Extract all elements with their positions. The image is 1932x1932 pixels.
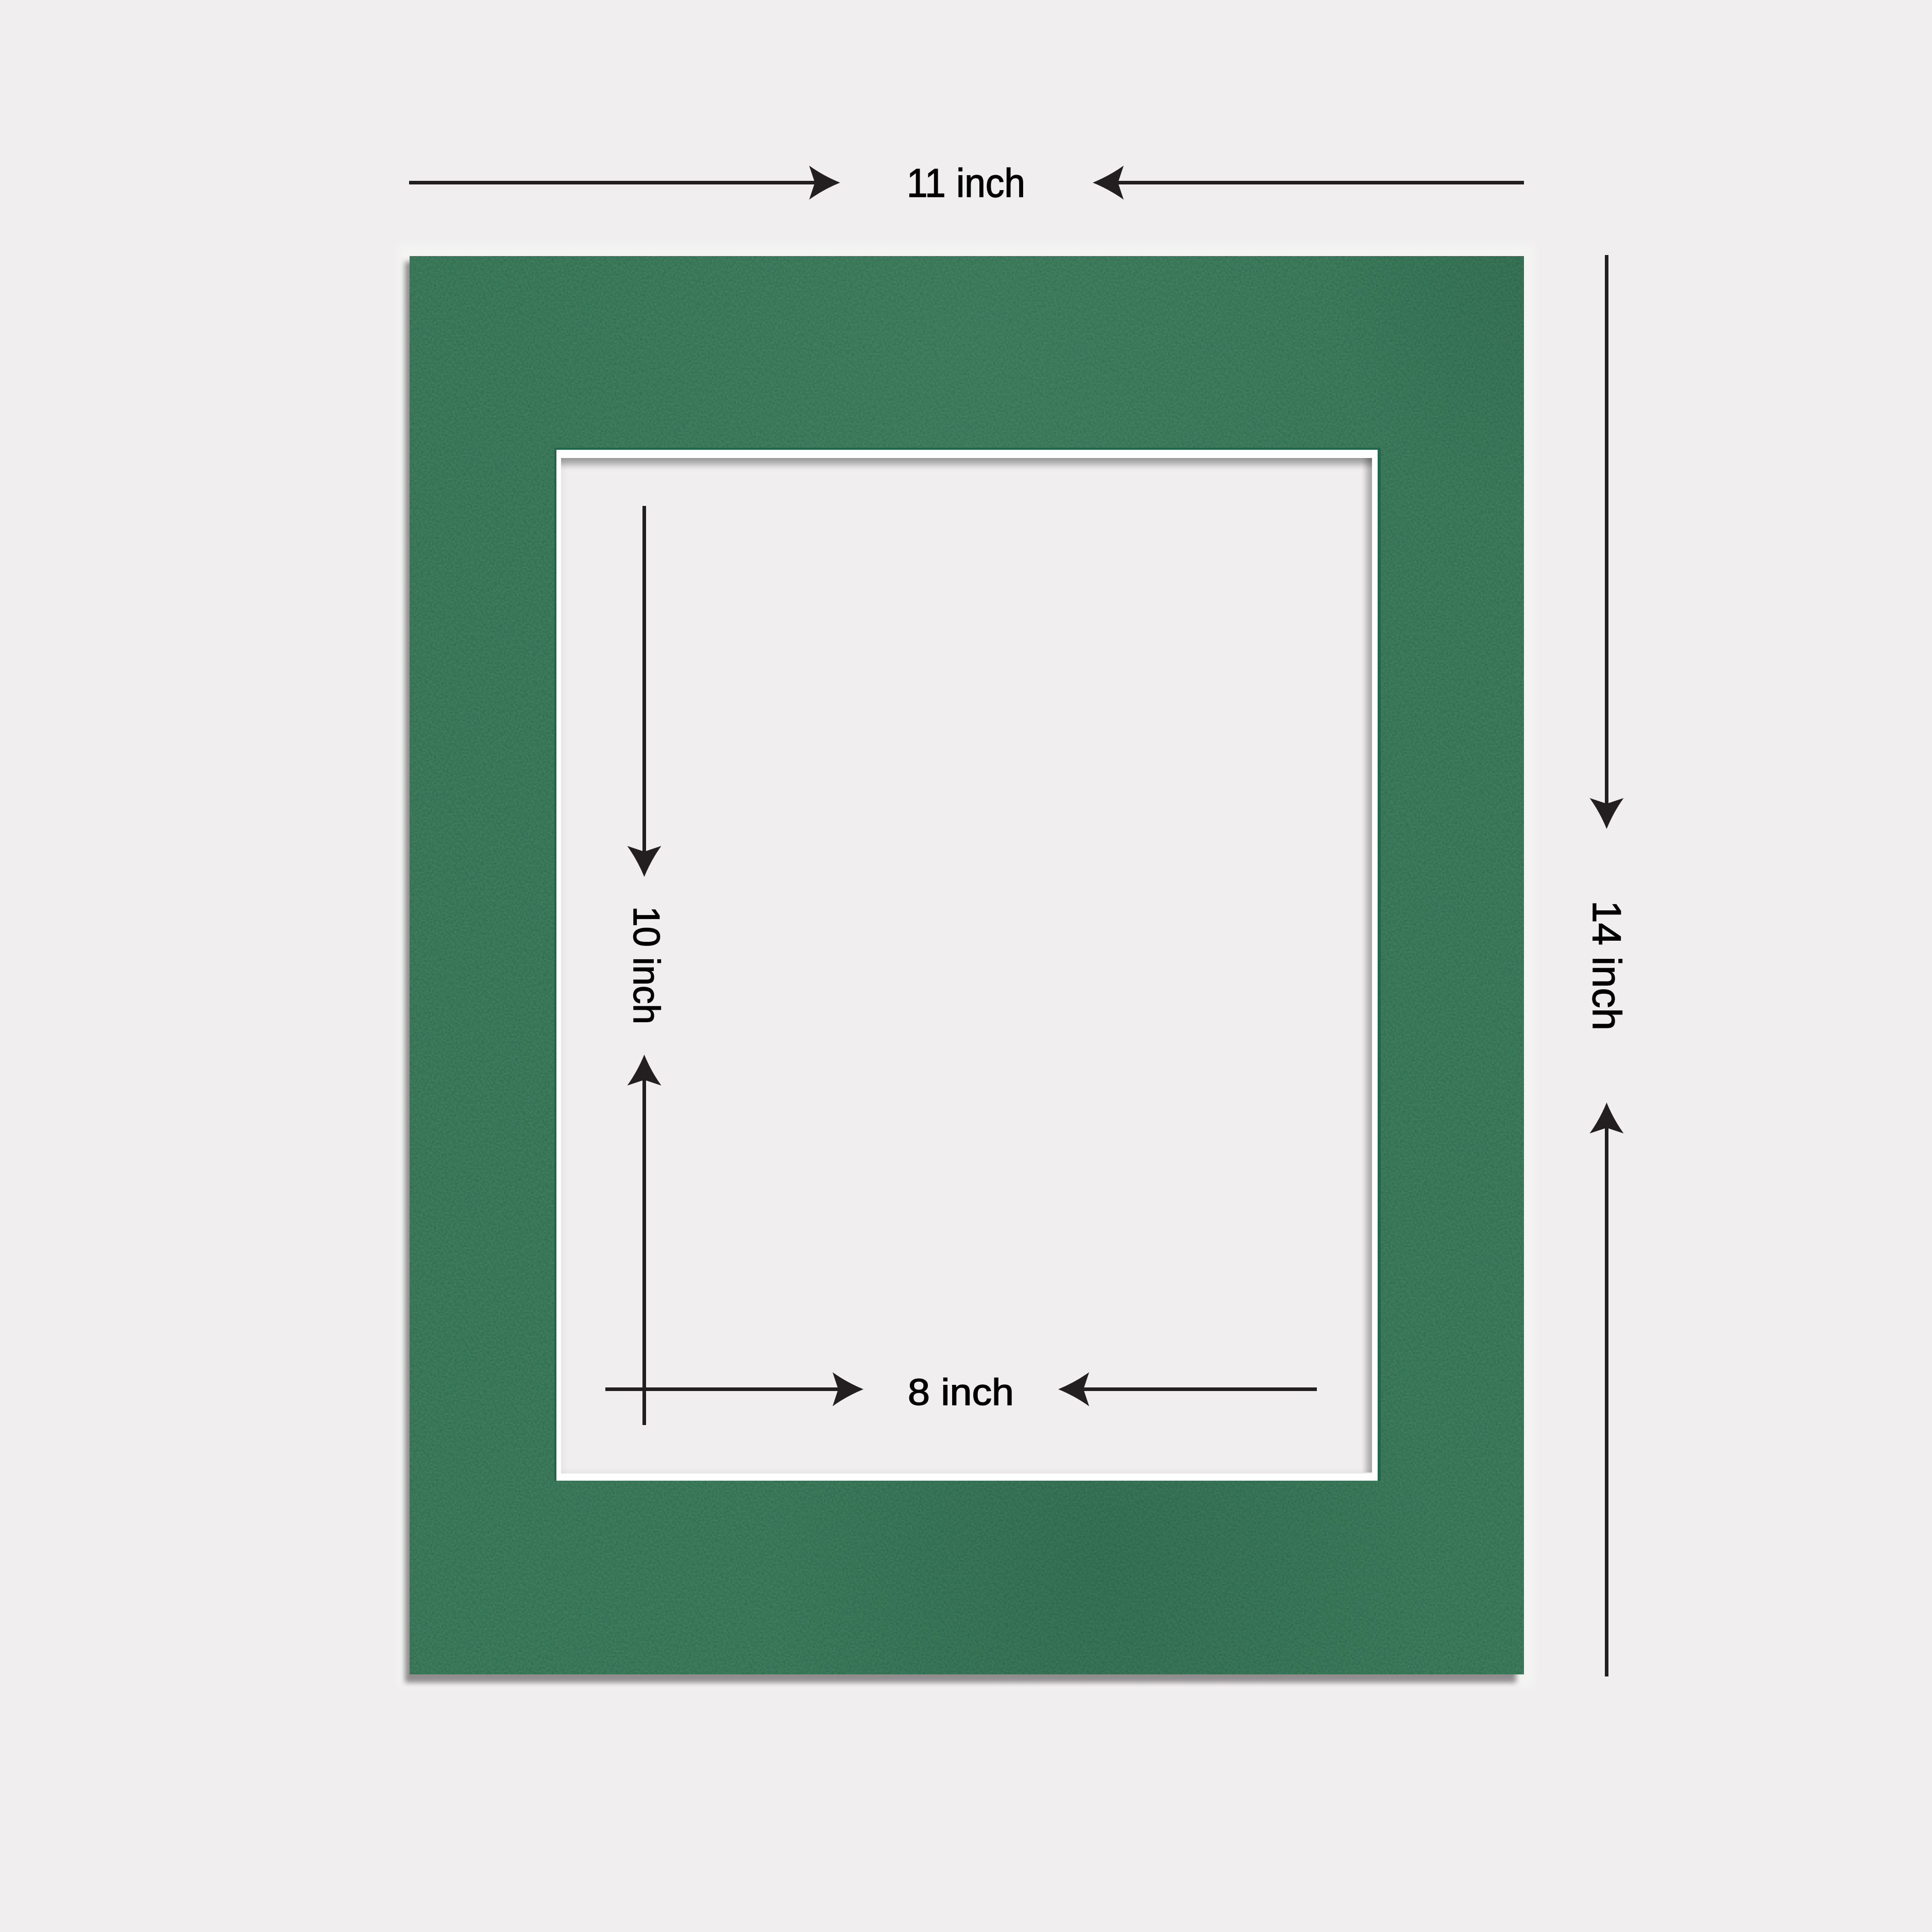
label: 10 inch: 10 inch <box>625 906 667 1024</box>
arrow: 14 inch height, bottom side <box>1590 1103 1624 1676</box>
window cut-out with white bevel <box>554 448 1381 1481</box>
mat board panel <box>398 244 1534 1687</box>
arrow: 8 inch width, left side <box>605 1372 863 1406</box>
arrow: 14 inch height, top side <box>1590 255 1624 829</box>
arrow: 10 inch height, bottom side <box>628 1055 662 1425</box>
arrow: 11 inch width, left side <box>409 166 840 200</box>
arrow: 10 inch height, top side <box>628 506 662 877</box>
label: 11 inch: 11 inch <box>907 160 1025 206</box>
arrow: 11 inch width, right side <box>1093 166 1524 200</box>
arrow: 8 inch width, right side <box>1058 1372 1317 1406</box>
label: 14 inch: 14 inch <box>1584 901 1630 1030</box>
label: 8 inch: 8 inch <box>908 1372 1014 1413</box>
